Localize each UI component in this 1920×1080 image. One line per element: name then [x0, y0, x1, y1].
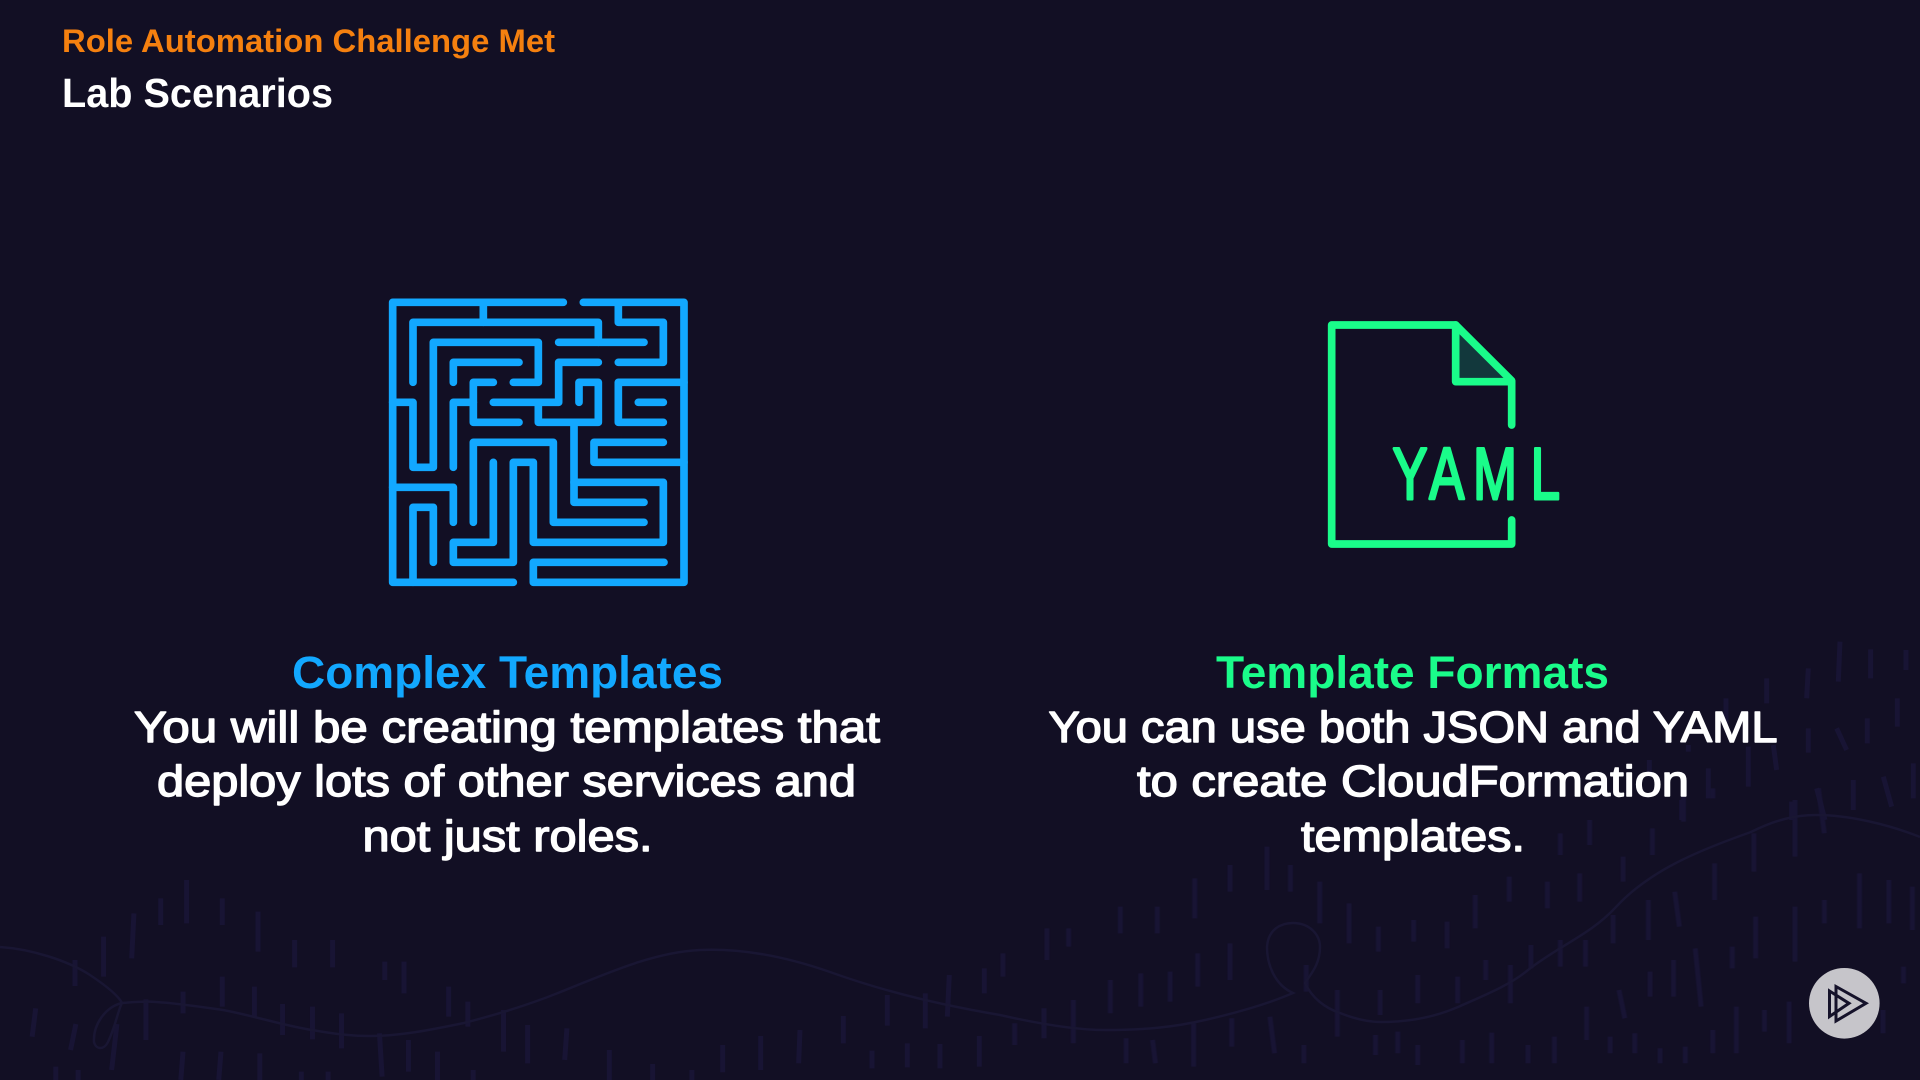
icon: YAML file	[1332, 325, 1560, 544]
icon: YAML file: Y	[1392, 434, 1428, 515]
icon: YAML file: M	[1473, 434, 1517, 515]
description: template formats: to create CloudFormation	[1137, 757, 1689, 806]
description: complex templates	[134, 703, 880, 861]
icon: maze	[393, 302, 684, 582]
title: Lab Scenarios	[62, 70, 333, 116]
heading: template formats: Template Formats	[1216, 647, 1609, 698]
description: template formats: templates.	[1301, 812, 1525, 861]
description: template formats: You can use both JSON and YAML	[1048, 703, 1778, 752]
icon: YAML file: A	[1429, 434, 1465, 515]
icon: play logo badge	[1809, 968, 1880, 1039]
section label: Role Automation Challenge Met	[62, 23, 555, 59]
text block: complex templates	[134, 647, 880, 861]
icon: YAML file: L	[1531, 434, 1560, 515]
description: complex templates: You will be creating templates that	[134, 703, 880, 752]
description: template formats	[1048, 703, 1778, 861]
description: complex templates: not just roles.	[362, 812, 652, 861]
text block: template formats	[1048, 647, 1778, 861]
description: complex templates: deploy lots of other services and	[157, 757, 856, 806]
heading: complex templates: Complex Templates	[292, 647, 723, 698]
